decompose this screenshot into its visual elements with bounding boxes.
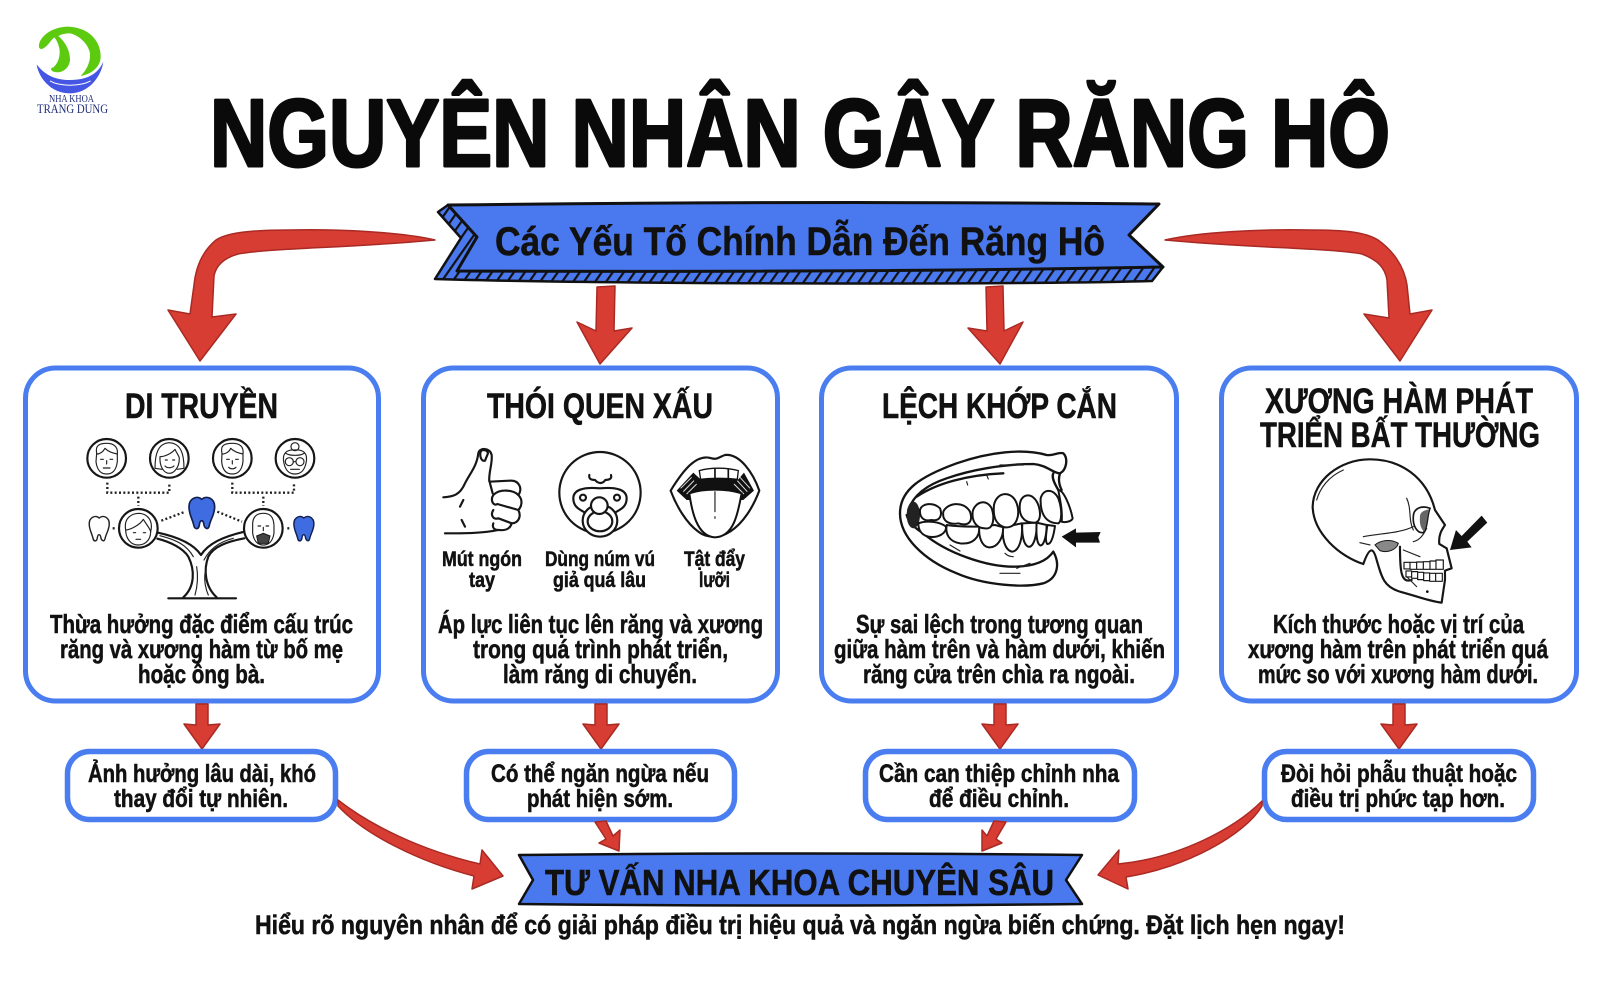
text: thói quen description: Áp lực liên tục lên răng và xương xyxy=(438,609,763,639)
caption: tongue thrust: lưỡi xyxy=(699,569,730,592)
icon: jaw arrow xyxy=(1450,516,1487,550)
text: thói quen description: trong quá trình phát triển, xyxy=(473,634,728,664)
icon: blue tooth xyxy=(189,497,215,529)
box: đòi hỏi phẫu thuật: Đòi hỏi phẫu thuật hoặc xyxy=(1281,758,1517,788)
arrow: banner to right card xyxy=(1165,230,1432,361)
box: ảnh hưởng lâu dài: Ảnh hưởng lâu dài, khó xyxy=(88,758,316,788)
box: đòi hỏi phẫu thuật xyxy=(1264,752,1534,820)
arrow: box 4 to footer banner xyxy=(1098,801,1262,889)
text: lệch khớp description xyxy=(834,609,1165,689)
panel: xương hàm phát triển bất thường xyxy=(1222,368,1576,701)
arrow: banner to third card xyxy=(968,286,1023,364)
icon: misaligned bite jaw xyxy=(900,452,1101,586)
arrow: box 3 to footer banner xyxy=(982,821,1006,851)
text: lệch khớp description: giữa hàm trên và hàm dưới, khiến xyxy=(834,634,1165,664)
caption: pacifier xyxy=(545,548,655,592)
panel: lệch khớp cắn xyxy=(822,368,1176,701)
arrow: box 1 to footer banner xyxy=(338,800,503,889)
box: ảnh hưởng lâu dài: thay đổi tự nhiên. xyxy=(114,785,288,813)
box: có thể ngăn ngừa: phát hiện sớm. xyxy=(527,785,673,813)
box: đòi hỏi phẫu thuật: điều trị phức tạp hơn. xyxy=(1291,785,1505,813)
text: di truyền description: Thừa hưởng đặc điểm cấu trúc xyxy=(50,609,353,639)
arrow: card 3 to box 3 xyxy=(982,704,1018,749)
heading: xương hàm xyxy=(1260,381,1540,455)
footer call to action: Hiểu rõ nguyên nhân để có giải pháp điều trị hiệu quả và ngăn ngừa biến chứng. Đặt lịch hẹn ngay! xyxy=(255,910,1345,940)
text: di truyền description xyxy=(50,609,353,689)
title: NGUYÊN NHÂN GÂY RĂNG HÔ xyxy=(210,79,1390,187)
arrow: card 1 to box 1 xyxy=(184,704,220,749)
logo: NHA KHOA xyxy=(49,94,94,105)
box: có thể ngăn ngừa xyxy=(466,752,734,820)
logo xyxy=(37,27,108,116)
icon: family tree xyxy=(87,439,314,598)
text: lệch khớp description: răng cửa trên chìa ra ngoài. xyxy=(863,659,1135,689)
box: ảnh hưởng lâu dài xyxy=(68,752,336,820)
icon: pacifier xyxy=(559,452,641,537)
top banner xyxy=(435,203,1163,283)
footer banner: TƯ VẤN NHA KHOA CHUYÊN SÂU xyxy=(545,861,1054,903)
caption: thumb sucking: tay xyxy=(469,569,495,592)
arrow: banner to second card xyxy=(577,286,632,364)
caption: thumb sucking xyxy=(442,548,522,592)
arrow: card 2 to box 2 xyxy=(583,704,619,749)
box: cần can thiệp xyxy=(866,752,1134,820)
caption: pacifier: Dùng núm vú xyxy=(545,548,655,571)
heading: di truyền: DI TRUYỀN xyxy=(125,386,278,426)
text: lệch khớp description: Sự sai lệch trong tương quan xyxy=(856,609,1143,639)
heading: thói quen xấu: THÓI QUEN XẤU xyxy=(487,386,713,426)
box: cần can thiệp: Cần can thiệp chỉnh nha xyxy=(879,760,1120,788)
icon: skull profile xyxy=(1313,459,1487,603)
text: xương hàm description: Kích thước hoặc vị trí của xyxy=(1273,609,1524,639)
icon: bite arrow xyxy=(1062,528,1101,547)
box: có thể ngăn ngừa: Có thể ngăn ngừa nếu xyxy=(491,760,709,788)
icon: thumb sucking hand xyxy=(443,449,521,533)
arrow: banner to left card xyxy=(168,230,435,361)
text: xương hàm description xyxy=(1248,609,1548,689)
logo: TRANG DUNG xyxy=(37,101,108,116)
top banner: Các Yếu Tố Chính Dẫn Đến Răng Hô xyxy=(495,218,1105,264)
text: di truyền description: răng và xương hàm từ bố mẹ xyxy=(60,634,343,664)
caption: tongue thrust xyxy=(684,548,745,592)
panel: di truyền xyxy=(26,368,378,701)
caption: pacifier: giả quá lâu xyxy=(553,569,646,592)
panel: thói quen xấu xyxy=(424,368,778,701)
text: thói quen description: làm răng di chuyển. xyxy=(503,659,697,689)
arrow: card 4 to box 4 xyxy=(1381,704,1417,749)
arrow: box 2 to footer banner xyxy=(595,821,620,851)
icon: tongue thrust mouth xyxy=(671,455,759,537)
box: cần can thiệp: để điều chỉnh. xyxy=(929,785,1069,813)
heading: xương hàm: XƯƠNG HÀM PHÁT xyxy=(1265,381,1533,421)
text: di truyền description: hoặc ông bà. xyxy=(138,659,265,689)
caption: thumb sucking: Mút ngón xyxy=(442,548,522,571)
heading: lệch khớp cắn: LỆCH KHỚP CẮN xyxy=(882,386,1117,426)
caption: tongue thrust: Tật đẩy xyxy=(684,548,745,571)
text: thói quen description xyxy=(438,609,763,689)
